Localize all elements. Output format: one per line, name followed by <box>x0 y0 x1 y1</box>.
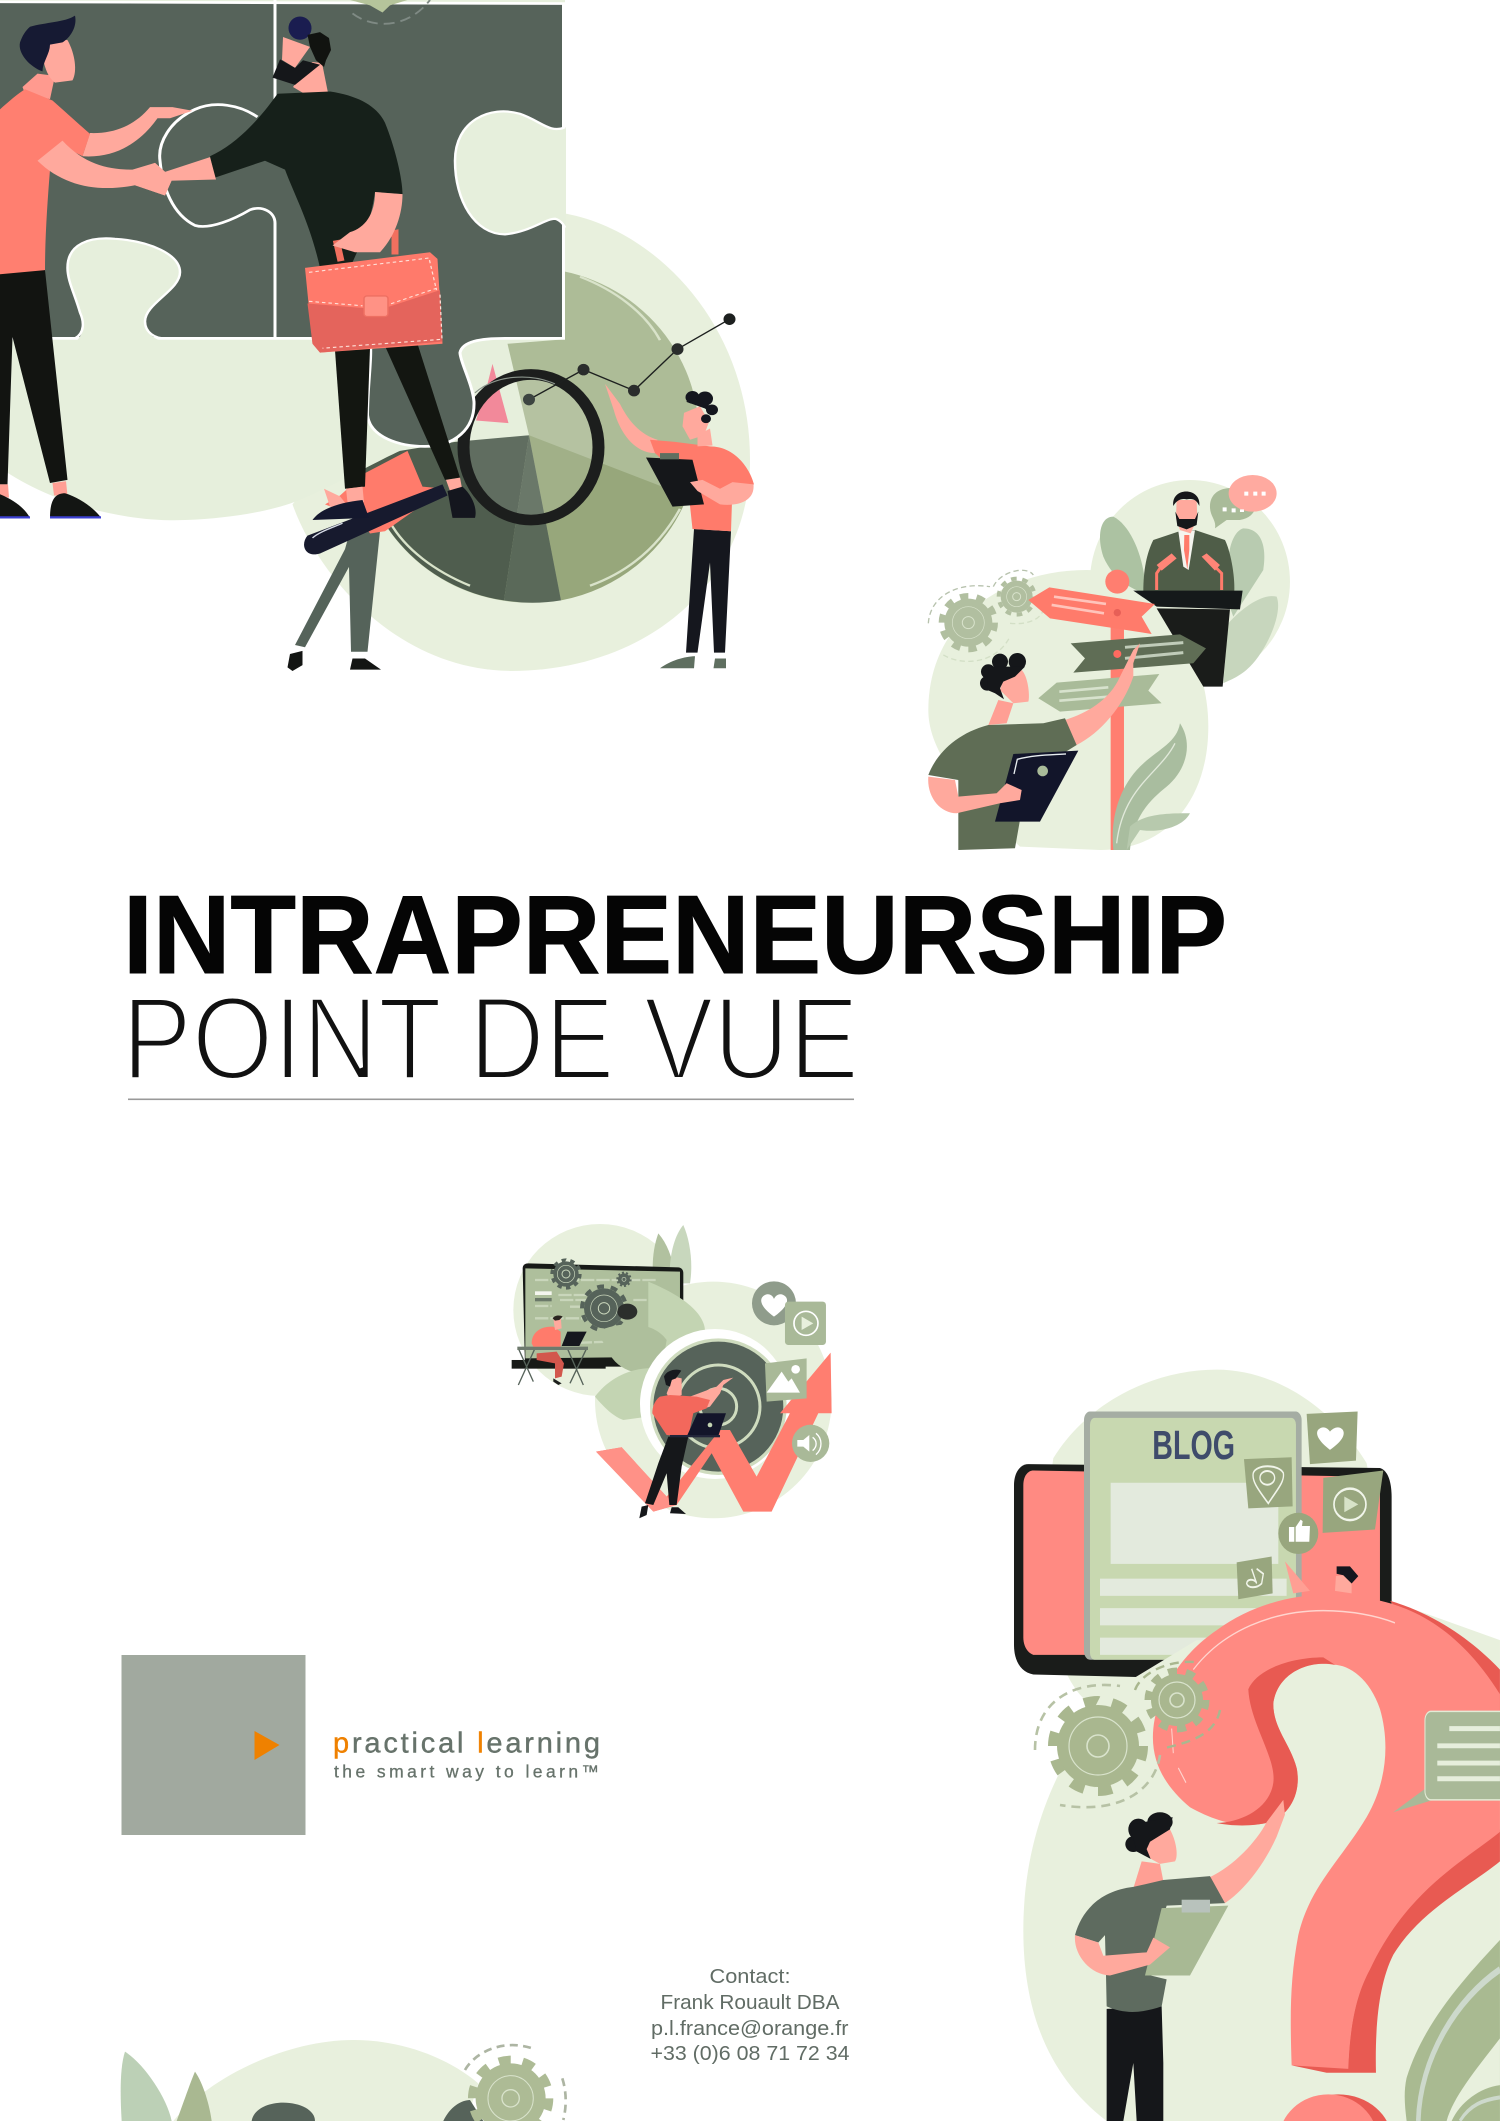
question mark <box>1153 1595 1500 2073</box>
illustration: bottom-left leaves and gear <box>121 2040 566 2121</box>
gears <box>928 570 1043 661</box>
gear <box>472 2060 549 2121</box>
person with briefcase <box>132 17 476 520</box>
subtitle: POINT DE VUE: POINT DE VUE <box>122 973 859 1105</box>
illustration: puzzle handshake and pie chart <box>0 0 754 671</box>
pale blobs <box>928 480 1290 850</box>
logo text: practical learning: practical learning <box>333 1728 600 1760</box>
gears beside question mark <box>1035 1662 1220 1807</box>
contact block <box>650 1965 850 2065</box>
contact block: +33 (0)6 08 71 72 34 <box>650 2042 850 2065</box>
person with clipboard <box>605 384 754 668</box>
signpost <box>1028 570 1206 850</box>
pale blob behind pie chart <box>292 212 750 671</box>
chat bubble <box>1393 1711 1500 1812</box>
small person behind question mark <box>1285 1561 1358 1593</box>
illustration: blog and question mark <box>1014 1370 1500 2121</box>
contact block: p.l.france@orange.fr <box>651 2017 849 2040</box>
person holding magnifier <box>288 451 445 671</box>
top leaves <box>653 1225 691 1283</box>
title: INTRAPRENEURSHIP: INTRAPRENEURSHIP <box>123 873 1227 997</box>
pale area across tablet corner and inside question mark <box>1133 1640 1390 1871</box>
leaves behind speaker <box>1100 517 1278 683</box>
leaves <box>121 2052 212 2121</box>
magnifier lens ring <box>464 375 598 520</box>
pale blob <box>1023 1370 1500 2121</box>
person pointing at target <box>639 1370 733 1518</box>
logo tagline: the smart way to learn™ <box>334 1762 599 1782</box>
pale blobs <box>513 1224 832 1518</box>
speaker at podium <box>1143 491 1234 592</box>
contact block: Contact: <box>710 1965 790 1988</box>
speech bubbles <box>1210 475 1277 528</box>
screen with code <box>512 1263 683 1369</box>
target <box>640 1329 790 1479</box>
pie chart <box>359 268 699 603</box>
briefcase <box>305 252 442 353</box>
growth arrow <box>596 1353 832 1512</box>
social icons <box>1237 1411 1383 1599</box>
person pointing at sign <box>928 643 1140 850</box>
dark gear fragment <box>443 2100 483 2121</box>
tablet with blog page <box>1014 1411 1392 1677</box>
dark shape <box>252 2103 315 2121</box>
big leaves <box>595 1282 705 1420</box>
puzzle pieces <box>0 0 566 446</box>
question mark dot <box>1279 2094 1392 2121</box>
media icons <box>752 1281 829 1462</box>
podium <box>1133 591 1243 687</box>
logo: grey square with orange triangle <box>122 1655 306 1835</box>
contact block: Frank Rouault DBA <box>660 1991 840 2014</box>
illustration: speaker and signpost <box>928 475 1290 850</box>
person left shaking hands <box>0 16 192 518</box>
magnifier handle <box>304 484 448 554</box>
dashed ring <box>465 2045 566 2120</box>
developer at desk <box>517 1316 588 1385</box>
rule under subtitle <box>128 1098 854 1100</box>
illustration: target, growth arrow and developer <box>512 1224 832 1518</box>
leaf at bottom right <box>1405 1940 1500 2121</box>
pale blob <box>173 2040 478 2121</box>
line chart <box>523 313 736 405</box>
screen gears <box>552 1260 637 1330</box>
plant <box>1113 723 1190 850</box>
pale blob behind puzzle <box>0 0 565 520</box>
person holding clipboard <box>1075 1800 1285 2121</box>
pink document under lens <box>476 364 508 423</box>
BLOG heading: BLOG <box>1152 1424 1235 1469</box>
